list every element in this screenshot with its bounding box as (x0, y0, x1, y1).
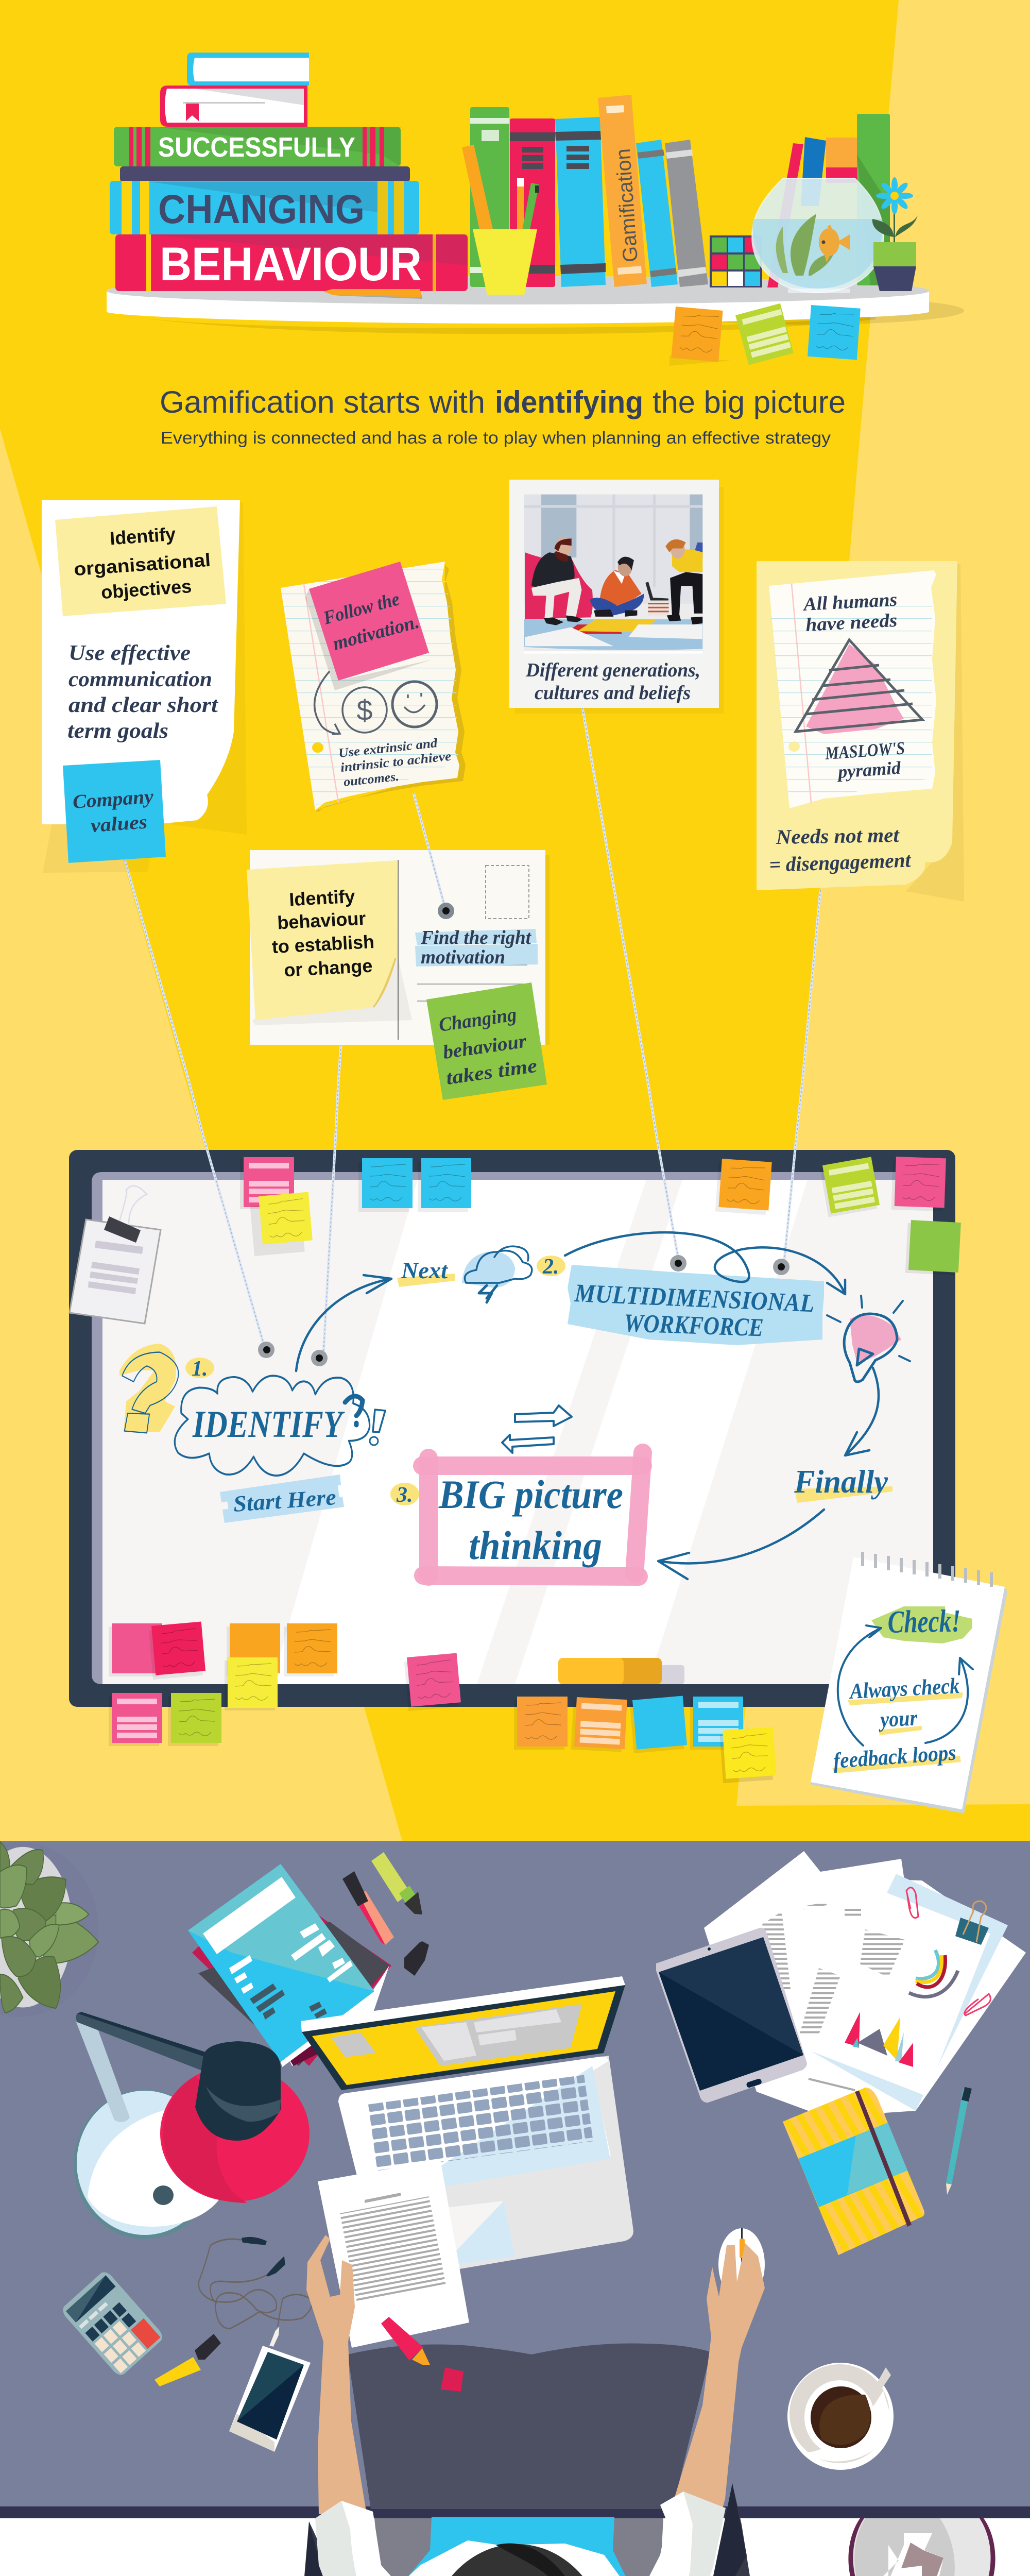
page edge (811, 1557, 1007, 1814)
pyramid caption (824, 738, 905, 782)
sticky: yellow (249, 1192, 314, 1256)
sticky heading: behaviour (277, 908, 366, 933)
crumpled paper (878, 2533, 943, 2576)
desk: yellow highlighter (154, 2334, 221, 2386)
arc chart (909, 1950, 958, 1997)
book: grey thin (665, 140, 708, 287)
back books (767, 114, 890, 287)
title line 3: BEHAVIOUR (160, 238, 422, 291)
number 1 (185, 1357, 214, 1381)
base (74, 2090, 216, 2239)
sticky: company values: values (90, 811, 148, 837)
shade (160, 2065, 310, 2201)
sticky: yellow tilted (719, 1727, 777, 1783)
punch hole (312, 742, 323, 753)
stamp (486, 866, 529, 919)
paper (42, 500, 240, 824)
photo: team on floor (524, 495, 702, 654)
tag heading: Identify (109, 523, 176, 549)
caption: cultures and beliefs (535, 682, 691, 704)
highlight: multidimensional workforce (568, 1265, 824, 1345)
title line 2: CHANGING (158, 186, 365, 232)
sheet text (762, 1902, 861, 2035)
screen panels (331, 2004, 582, 2066)
feedback arrows (838, 1625, 973, 1745)
sticky: company values (63, 760, 166, 863)
scribbled marks (345, 1396, 385, 1445)
board stickies bottom (109, 1622, 777, 1783)
sticky: orange 2 (284, 1623, 337, 1676)
torn paper shadow (315, 565, 466, 812)
desk: red marker on paper (381, 2317, 430, 2365)
blue sheet (811, 1874, 1008, 2111)
pink sticky (309, 562, 429, 681)
base knob (153, 2185, 174, 2205)
label: always check: Always check (848, 1674, 960, 1704)
drawing: identify (119, 1344, 385, 1523)
arrow: loop to bulb (565, 1232, 845, 1294)
label: start here: Start Here (232, 1484, 337, 1517)
board frame (69, 1150, 955, 1707)
highlight: start here (220, 1475, 344, 1523)
desk: plant (0, 1842, 98, 2017)
book: red (115, 234, 468, 291)
sticky: cyan 1 (358, 1158, 413, 1212)
green sticky: takes time (444, 1055, 539, 1089)
paper rules (770, 598, 932, 804)
sticky: orange (227, 1623, 280, 1676)
cream keys (94, 2321, 146, 2374)
sticky: pink tilted (404, 1653, 461, 1711)
person: right arm and hand (670, 2243, 765, 2514)
sticky: orange 3 (514, 1697, 568, 1750)
book: red upright (510, 118, 555, 287)
headline: identifying (495, 385, 643, 419)
frame: big picture (422, 1453, 643, 1577)
tag heading (73, 523, 211, 603)
torn paper (281, 562, 459, 810)
top sheet (811, 1893, 990, 2096)
label: identify: IDENTIFY (192, 1403, 345, 1446)
text: find the right motivation: motivation (421, 946, 505, 968)
sticky heading: or change (283, 955, 373, 980)
doodle: dollar and smile (315, 671, 437, 734)
tag heading: objectives (100, 575, 192, 603)
green sticky: Changing (437, 1004, 518, 1036)
background: light panel left (0, 429, 402, 1841)
sticky heading: Identify (288, 886, 355, 910)
text: find the right motivation (420, 927, 531, 968)
shelf with books (107, 53, 964, 366)
book: red with bookmark (160, 86, 307, 127)
desk: striped notebook (783, 2088, 924, 2255)
shade cap (195, 2041, 281, 2141)
double arrows (502, 1405, 572, 1453)
trackpad (446, 2201, 515, 2264)
note: follow the motivation: outcomes. (343, 770, 400, 789)
person 3 (665, 539, 702, 624)
punch hole (788, 741, 800, 752)
book: green (114, 127, 401, 166)
cover blocks (203, 1877, 353, 1994)
desk: phone (229, 2346, 311, 2452)
highlights (415, 929, 538, 967)
sticky: orange lined (571, 1697, 627, 1752)
label: feedback loops: feedback loops (832, 1740, 957, 1773)
clips (906, 1888, 990, 2015)
ruler (462, 145, 493, 232)
book: dark (120, 166, 410, 182)
sticky text: Follow the (321, 588, 402, 629)
hair (425, 2544, 609, 2576)
pencils in cup (517, 178, 539, 232)
note: follow the motivation: intrinsic to achieve (340, 750, 452, 775)
highlights: yellow underlines (832, 1692, 963, 1773)
number 2: 2. (542, 1255, 559, 1279)
person at desk (303, 2483, 754, 2576)
icon: lightbulb (827, 1296, 910, 1382)
pyramid (796, 640, 922, 734)
goldfish (819, 225, 850, 263)
desk: magazine stack (188, 1864, 391, 2067)
body text: communication (68, 668, 212, 691)
divider (398, 860, 399, 1040)
binder clip (955, 1901, 989, 1945)
whiteboard (69, 1150, 955, 1707)
sticky: red (148, 1622, 206, 1680)
book: green upright (470, 107, 509, 287)
doodle: dollar and smile: $ (356, 694, 373, 726)
book: cyan upright (555, 117, 606, 287)
shadow (43, 502, 247, 873)
label: check: Check! (887, 1604, 961, 1640)
binder clip (104, 1186, 147, 1243)
board reflections (102, 1180, 933, 1684)
cloud (175, 1376, 370, 1476)
label: next: Next (401, 1257, 448, 1283)
report lines (860, 1929, 905, 1977)
label: multidimensional workforce: WORKFORCE (624, 1308, 764, 1342)
yellow page (757, 561, 957, 890)
strap (855, 2091, 912, 2227)
sticky notes under shelf (670, 303, 861, 366)
sticky: lime (168, 1693, 221, 1746)
desk edge (0, 2506, 1030, 2518)
base (338, 2056, 633, 2269)
body text: term goals (67, 719, 168, 743)
background: desk (0, 1841, 1030, 2506)
document title (365, 2193, 401, 2203)
desk: coffee (787, 2363, 894, 2470)
body text: Use effective (68, 641, 191, 665)
background: light panel right (736, 0, 1030, 1806)
desk: calculator (60, 2269, 165, 2378)
screen (312, 1991, 615, 2085)
number 3: 3. (396, 1483, 413, 1507)
desk: laptop (301, 1976, 633, 2269)
card shadow (545, 855, 550, 1045)
desk: paper stack (704, 1851, 1026, 2136)
book: cyan (110, 181, 419, 234)
marker cap (404, 1941, 429, 1976)
number 2 (537, 1255, 565, 1279)
board stickies top (240, 1157, 961, 1276)
needs text: All humans (802, 589, 898, 615)
body text: and clear short (68, 693, 218, 717)
arrow: finally to big picture (658, 1510, 824, 1579)
sticky: company values: Company (72, 786, 154, 813)
sticky: pink lined (109, 1693, 162, 1746)
lined paper (769, 570, 936, 808)
book: cyan thin (636, 140, 678, 287)
note: follow the motivation (281, 562, 466, 812)
headline: the big picture (653, 385, 846, 419)
headline (160, 385, 846, 419)
pins (258, 903, 789, 1366)
highlight: check (871, 1606, 972, 1643)
page (811, 1557, 1005, 1809)
books and laptop (645, 582, 669, 616)
fishbowl (752, 178, 884, 293)
arm (76, 2013, 209, 2071)
person: torso on desk (348, 2343, 711, 2509)
sticky: cyan lined (690, 1697, 743, 1750)
string: motivation note to postcard pin (414, 793, 446, 911)
frame (509, 480, 719, 708)
red marker (342, 1871, 394, 1945)
sticky: cyan tilted (629, 1696, 688, 1753)
desk: pencil (946, 2087, 972, 2195)
board inset (92, 1172, 933, 1684)
floor sheets (564, 624, 622, 634)
yellow cup (473, 229, 537, 295)
red key (131, 2318, 161, 2349)
curl (373, 958, 396, 1007)
bottom text (769, 823, 912, 876)
bottom text: = disengagement (769, 848, 912, 876)
label: your: your (878, 1706, 919, 1732)
keyboard (367, 2075, 593, 2171)
sticky: pink lined (240, 1157, 294, 1209)
note: postcard (247, 850, 550, 1100)
trash can (848, 2518, 995, 2576)
sticky heading: to establish (271, 931, 375, 957)
sticky: pink (109, 1623, 162, 1676)
sticky: yellow (225, 1657, 278, 1710)
flower plant (872, 177, 918, 291)
strings (125, 708, 820, 1354)
document lines (340, 2196, 446, 2302)
bottom text: Needs not met (775, 823, 900, 849)
home button (746, 2078, 762, 2088)
number 3 (390, 1483, 419, 1507)
shadow (515, 487, 724, 714)
headline: Gamification starts with (160, 385, 485, 419)
shirt (315, 2492, 726, 2576)
card (250, 850, 545, 1045)
coffee surface (811, 2386, 871, 2448)
triangle chart (845, 2012, 913, 2067)
needs text: have needs (805, 610, 898, 636)
arrow: to next (296, 1275, 391, 1371)
margin line (792, 584, 811, 803)
desk: lamp (74, 2012, 310, 2239)
keyboard well (440, 2066, 610, 2187)
note: polaroid (509, 480, 724, 714)
rubik cube (710, 235, 762, 287)
label: big picture: BIG picture (438, 1472, 623, 1517)
spine title: Gamification (612, 148, 642, 263)
board surface (102, 1180, 933, 1684)
sticky: green (905, 1220, 961, 1276)
clipboard paper (70, 1186, 161, 1324)
sticky heading (271, 886, 375, 980)
text: find the right motivation: Find the right (420, 927, 531, 948)
person 2 (590, 557, 644, 617)
back sheets (704, 1851, 1026, 2136)
address lines (417, 965, 527, 1001)
question mark (122, 1352, 178, 1433)
shadow (906, 564, 964, 902)
label: multidimensional workforce (574, 1278, 815, 1342)
highlight: next (397, 1274, 455, 1287)
curl shadow (252, 956, 412, 1025)
book: cyan top (187, 53, 309, 86)
strut (76, 2022, 130, 2122)
note: follow the motivation: motivation. (331, 612, 421, 655)
pyramid caption: pyramid (836, 758, 902, 782)
margin line (304, 584, 338, 803)
top (401, 2517, 637, 2576)
chair arms (303, 2483, 754, 2576)
desk: document (318, 2160, 469, 2348)
upright books (470, 95, 708, 287)
small text: Use extrinsic and (338, 736, 438, 760)
title line 1: SUCCESSFULLY (158, 132, 355, 163)
shelf (107, 276, 964, 334)
lime highlighter (371, 1852, 422, 1914)
seaweed (791, 214, 816, 276)
notebook: check feedback loops (811, 1552, 1007, 1814)
label: multidimensional workforce: MULTIDIMENSIONAL (574, 1278, 815, 1317)
number 1: 1. (192, 1357, 208, 1381)
highlight: finally (795, 1486, 892, 1503)
green sticky (426, 982, 547, 1100)
eraser (558, 1658, 684, 1684)
desk: earphones (199, 2237, 312, 2347)
question mark highlight (119, 1344, 176, 1432)
sticky: red square (441, 2367, 464, 2392)
dark keys (85, 2302, 136, 2352)
screen highlight (421, 2009, 561, 2061)
desk: markers (342, 1852, 429, 1976)
sticky: pink (891, 1157, 946, 1211)
icon: storm cloud (462, 1246, 532, 1302)
sticky: cyan 2 (418, 1158, 471, 1212)
tag heading: organisational (73, 549, 211, 580)
torso back (374, 2518, 663, 2576)
person 1 (531, 537, 582, 625)
green sticky: behaviour (441, 1030, 528, 1063)
spiral (863, 1552, 991, 1587)
function bars (79, 2302, 108, 2329)
arrow: bulb to finally (845, 1368, 879, 1455)
display (66, 2275, 115, 2323)
sticky: orange (715, 1159, 772, 1215)
pencil on shelf (323, 289, 422, 299)
label: thinking: thinking (469, 1523, 602, 1568)
background: white base (0, 2518, 1030, 2576)
caption (525, 659, 700, 704)
yellow tag (55, 506, 226, 616)
desk: tablet (656, 1928, 807, 2103)
note: organisational objectives (42, 500, 247, 873)
band (798, 2123, 907, 2207)
label: finally: Finally (794, 1463, 888, 1500)
body text (67, 641, 218, 743)
lid white (301, 1976, 625, 2032)
desk: mouse (718, 2228, 765, 2300)
subheading: Everything is connected and has a role to play when planning an effective strategy (161, 428, 831, 447)
lid (302, 1985, 625, 2090)
needs text (802, 589, 898, 636)
caption: Different generations, (525, 659, 700, 681)
note: maslow (757, 561, 964, 902)
sticky: lime lined (819, 1157, 880, 1217)
pyramid caption: MASLOW'S (824, 738, 905, 764)
beanbag (525, 552, 593, 619)
sticky shadow (305, 589, 433, 690)
book: gamification spine (598, 95, 647, 287)
yellow sticky (247, 860, 398, 1020)
cover (188, 1864, 374, 2062)
person: left arm and hand (306, 2235, 367, 2514)
